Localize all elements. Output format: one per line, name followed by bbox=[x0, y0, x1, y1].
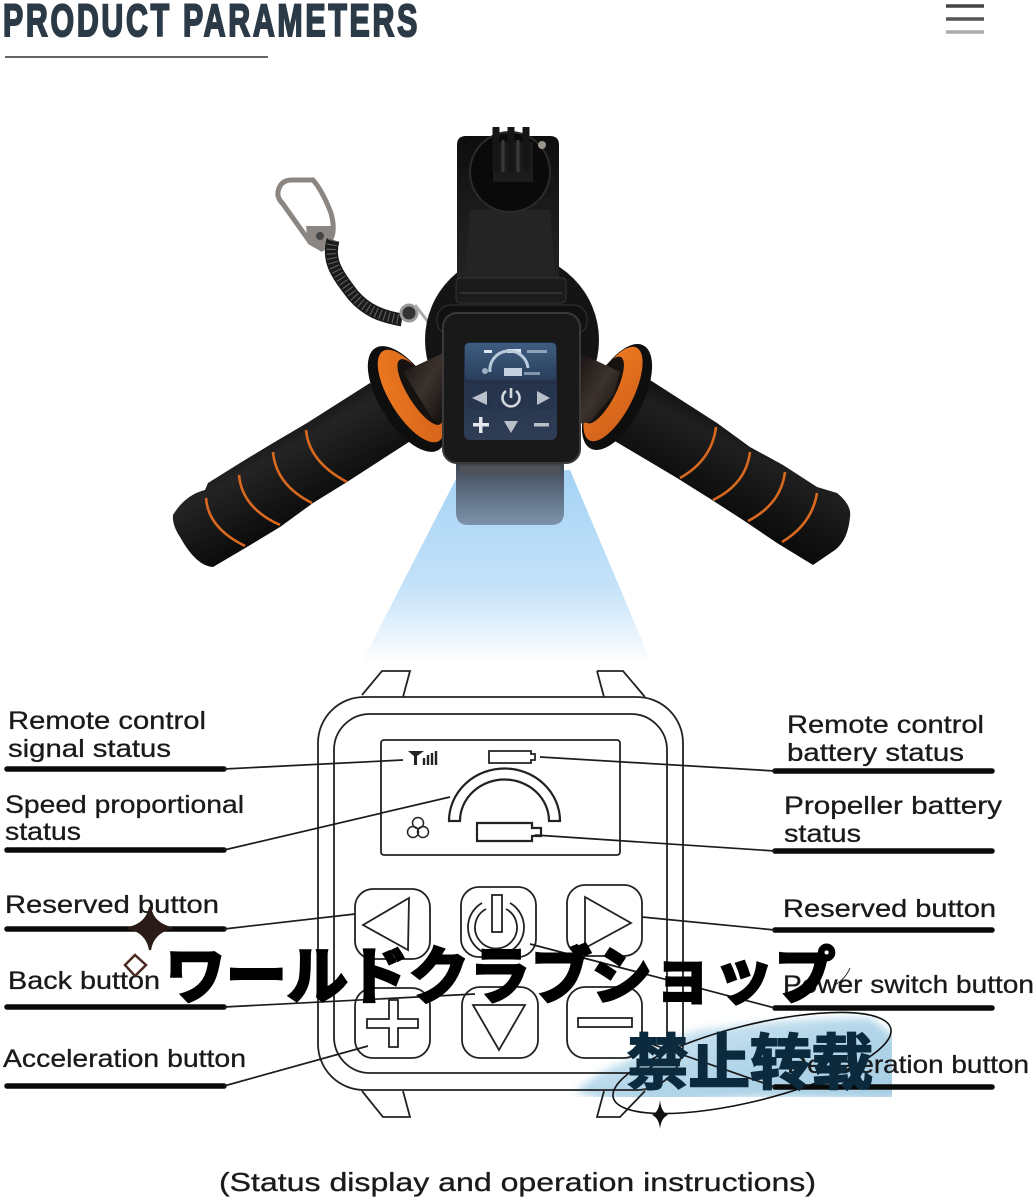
watermark: shop name bbox=[125, 907, 850, 1012]
top strap with action camera mount bbox=[456, 127, 566, 303]
remote face bbox=[437, 305, 587, 463]
icon: signal bbox=[408, 751, 436, 765]
callout: reserved button left bbox=[5, 891, 355, 929]
diagram: remote control outline bbox=[318, 671, 683, 1117]
left flared cup bbox=[352, 334, 462, 464]
button: right bbox=[567, 885, 642, 956]
callout: speed status: status bbox=[5, 818, 81, 846]
right callouts bbox=[530, 711, 1034, 1087]
round base disc bbox=[425, 253, 599, 427]
strap lugs bbox=[362, 671, 645, 1117]
callout: remote battery: Remote control bbox=[787, 711, 984, 739]
watermark star bbox=[128, 907, 172, 950]
lower strap bbox=[456, 455, 564, 525]
light cone bbox=[361, 470, 652, 664]
status screen bbox=[381, 740, 620, 855]
title underline bbox=[5, 56, 268, 58]
watermark ellipse bbox=[604, 992, 900, 1134]
status display bbox=[465, 343, 556, 380]
watermark hollow diamond bbox=[125, 955, 146, 976]
callout: deceleration bbox=[640, 1040, 1029, 1087]
blue brush stroke behind watermark bbox=[575, 1018, 900, 1104]
inner body bbox=[334, 714, 667, 1073]
watermark: no reposting bbox=[604, 992, 900, 1134]
icon: remote battery bbox=[489, 751, 535, 763]
watermark sparkle bbox=[652, 1100, 668, 1129]
icon: propeller battery bbox=[477, 823, 541, 841]
callout: remote battery bbox=[540, 711, 992, 771]
callout: propeller battery: status bbox=[784, 820, 861, 848]
control panel bbox=[464, 342, 557, 440]
watermark text: ワールドクラブショップ bbox=[165, 943, 835, 1012]
left callouts bbox=[3, 707, 475, 1086]
lanyard clip and coil bbox=[278, 180, 436, 332]
callout: reserved button right bbox=[642, 895, 996, 930]
callout: speed status: Speed proportional bbox=[5, 791, 244, 819]
panel buttons bbox=[467, 384, 555, 433]
callout: signal status: signal status bbox=[8, 735, 171, 763]
button: minus bbox=[567, 987, 642, 1058]
caption: (Status display and operation instructions) bbox=[219, 1167, 816, 1197]
callout: back button: Back button bbox=[8, 967, 160, 995]
right flared cup bbox=[568, 334, 666, 460]
callout: signal status: Remote control bbox=[8, 707, 206, 735]
callout: power switch bbox=[530, 944, 1034, 1008]
button: plus bbox=[355, 988, 430, 1058]
button: down bbox=[462, 987, 538, 1058]
icon: hamburger menu bbox=[946, 6, 984, 32]
callout: speed status bbox=[5, 791, 450, 850]
callout: propeller battery bbox=[535, 792, 1003, 851]
left grip bbox=[173, 383, 412, 567]
callout: acceleration button bbox=[3, 1045, 368, 1086]
watermark text: 禁止转载 bbox=[627, 1030, 873, 1097]
callout: remote battery: battery status bbox=[787, 739, 964, 767]
callout: reserved button right: Reserved button bbox=[783, 895, 996, 923]
icon: propeller bbox=[408, 818, 428, 838]
callout: signal status bbox=[7, 707, 403, 769]
button: power bbox=[461, 887, 536, 957]
callout: back button bbox=[7, 967, 475, 1007]
button: left bbox=[355, 889, 430, 959]
callout: propeller battery: Propeller battery bbox=[784, 792, 1003, 820]
right grip bbox=[608, 380, 850, 565]
callout: acceleration button: Acceleration button bbox=[3, 1045, 246, 1073]
speed gauge arc bbox=[449, 769, 560, 821]
callout: deceleration: Deceleration button bbox=[787, 1051, 1029, 1079]
callout: power switch: Power switch button bbox=[783, 971, 1034, 999]
callout: reserved button left: Reserved button bbox=[5, 891, 219, 919]
watermark flourish bbox=[835, 968, 850, 985]
product photo: remote control bbox=[173, 127, 850, 567]
outer body bbox=[318, 697, 683, 1090]
